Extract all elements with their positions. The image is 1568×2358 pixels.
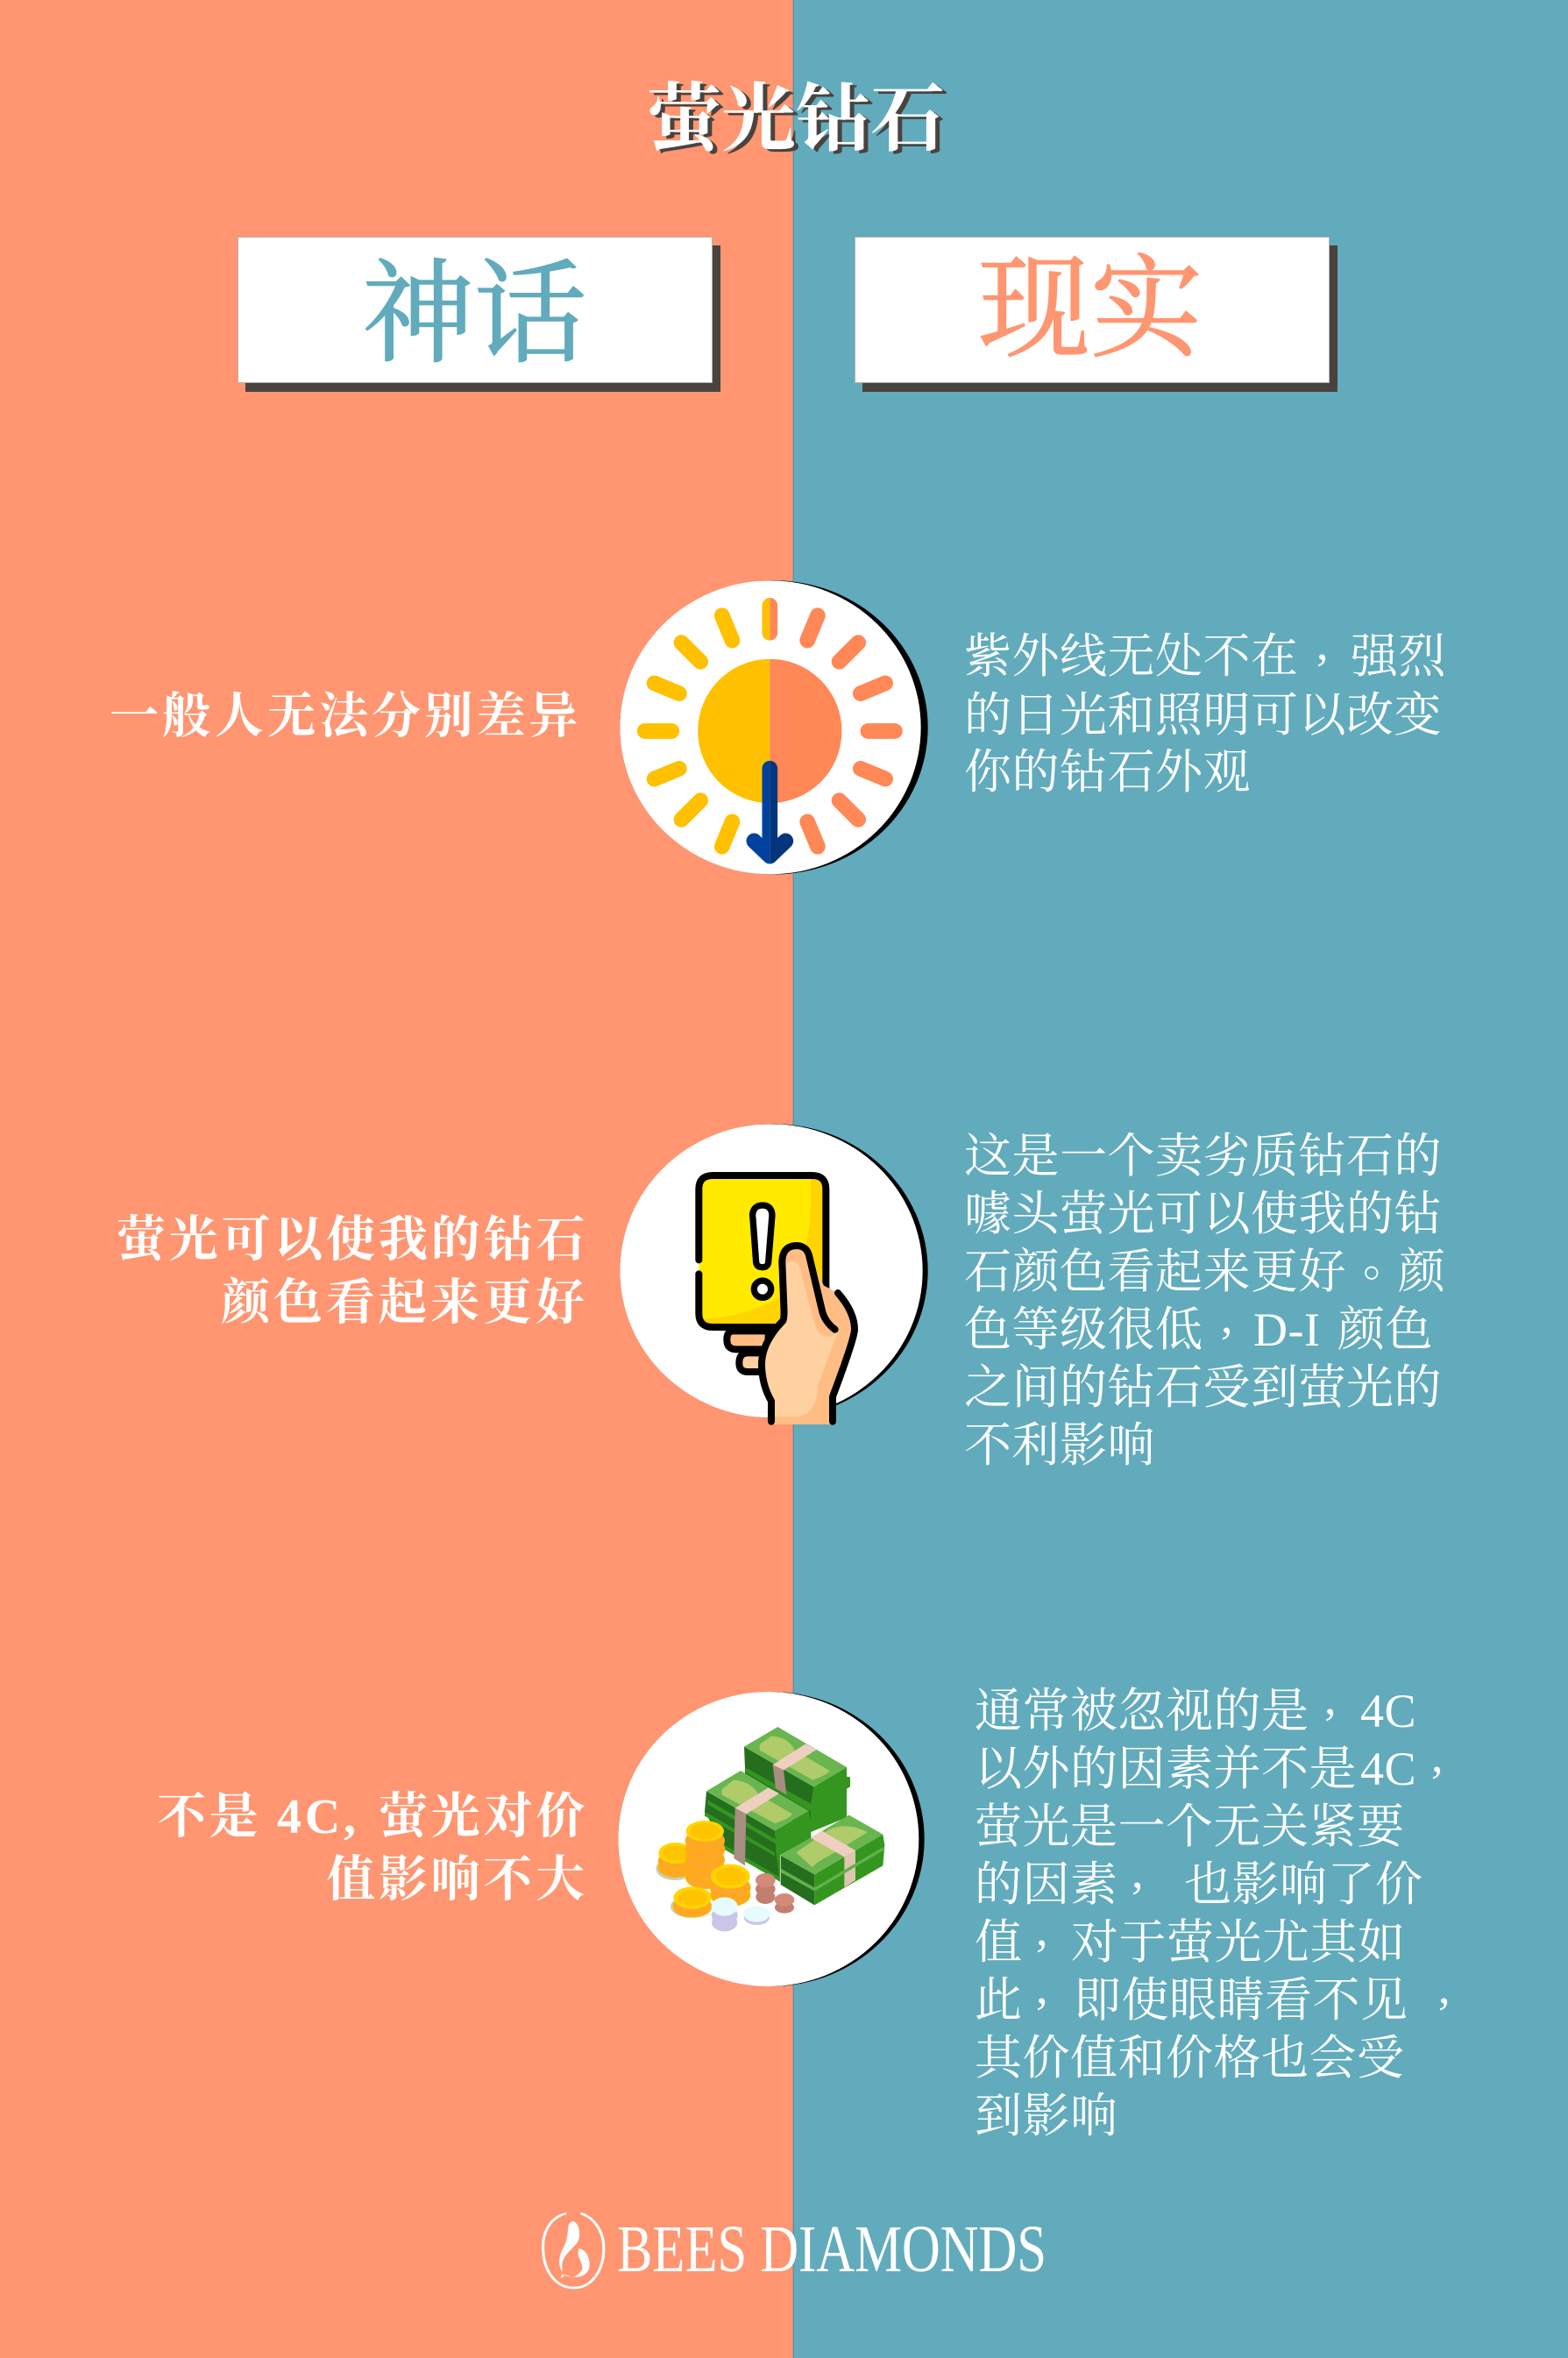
- middle cash stack: [705, 1771, 811, 1882]
- exclamation mark: [753, 1205, 772, 1297]
- icon: hand holding yellow warning card: [620, 1124, 928, 1424]
- reality text 3: 值: [975, 1916, 1022, 1969]
- reality text 3: 此: [975, 1974, 1022, 2027]
- panel: reality header card: [855, 237, 1337, 392]
- reality text 3: 到影响: [975, 2090, 1118, 2142]
- reality text 1: 的日光和照明可以改变: [964, 689, 1442, 742]
- back cash stack: [744, 1727, 850, 1832]
- reality text 2: 之间的钻石受到萤光的: [964, 1361, 1442, 1414]
- reality text 2: 颜: [1398, 1246, 1446, 1298]
- reality text 3: ,: [1036, 1961, 1048, 2014]
- reality text 1: [964, 617, 1446, 799]
- reality text 3: 对于萤光尤其如: [1071, 1916, 1406, 1969]
- reality text 3: 的因素: [975, 1858, 1118, 1911]
- reality text 3: ,: [1324, 1672, 1337, 1724]
- reality text 3: ,: [1036, 1903, 1048, 1956]
- reality text 1: ,: [1316, 617, 1329, 670]
- reality text 2: ,: [1221, 1290, 1233, 1343]
- reality text 3: ,: [1132, 1845, 1144, 1898]
- reality text 3: 也影响了价: [1184, 1858, 1423, 1911]
- myth text 2: [117, 1213, 588, 1331]
- reality text 3: 4C: [1360, 1743, 1416, 1795]
- reality text 1: 紫外线无处不在: [964, 630, 1299, 683]
- myth text 1: 一般人无法分别差异: [110, 690, 581, 744]
- reality text 2: [964, 1130, 1446, 1472]
- title: 萤光钻石: [647, 79, 945, 161]
- myth text 3: 值影响不大: [326, 1853, 588, 1907]
- logo: Bees Diamonds: [543, 2212, 1047, 2288]
- heading: myth: 神话: [362, 252, 586, 377]
- background: reality side: [793, 0, 1568, 2358]
- reality text 3: ,: [1438, 1961, 1451, 2014]
- icon: half-coloured sun with down arrow: [620, 580, 928, 874]
- reality text 3: 以外的因素并不是: [975, 1743, 1357, 1795]
- reality text 1: 你的钻石外观: [964, 746, 1251, 799]
- icon: cash stacks and coins: [618, 1692, 925, 1986]
- panel: myth header card: [238, 237, 720, 392]
- myth text 3: 萤光对价: [379, 1790, 588, 1844]
- reality text 2: 颜色: [1337, 1303, 1433, 1356]
- reality text 2: D-I: [1253, 1303, 1320, 1356]
- front cash stack: [781, 1815, 884, 1905]
- reality text 3: 4C: [1360, 1685, 1416, 1737]
- reality text 3: ,: [1431, 1729, 1444, 1782]
- logo emblem: [543, 2213, 604, 2288]
- reality text 2: 。: [1363, 1233, 1411, 1286]
- reality text 2: 石颜色看起来更好: [964, 1246, 1346, 1298]
- myth text 3: [157, 1790, 588, 1907]
- heading: reality: 现实: [978, 247, 1203, 372]
- background: myth side: [0, 0, 793, 2358]
- coin stacks: [656, 1821, 794, 1931]
- reality text 3: 通常被忽视的是: [975, 1685, 1309, 1737]
- myth text 3: 4C,: [277, 1790, 359, 1844]
- reality text 2: 色等级很低: [964, 1303, 1203, 1356]
- reality text 2: 噱头萤光可以使我的钻: [964, 1188, 1442, 1240]
- myth text 2: 萤光可以使我的钻石: [117, 1213, 588, 1268]
- reality text 1: 强烈: [1351, 630, 1446, 683]
- reality text 3: 即使眼睛看不见: [1074, 1974, 1408, 2027]
- myth text 3: 不是: [157, 1790, 262, 1844]
- reality text 3: 萤光是一个无关紧要: [975, 1800, 1404, 1853]
- logo wordmark: BEES DIAMONDS: [617, 2212, 1047, 2286]
- myth text 2: 颜色看起来更好: [221, 1276, 588, 1331]
- reality text 2: 不利影响: [964, 1419, 1155, 1472]
- reality text 2: 这是一个卖劣质钻石的: [964, 1130, 1442, 1183]
- reality text 3: 其价值和价格也会受: [975, 2032, 1404, 2085]
- reality text 3: [975, 1672, 1451, 2142]
